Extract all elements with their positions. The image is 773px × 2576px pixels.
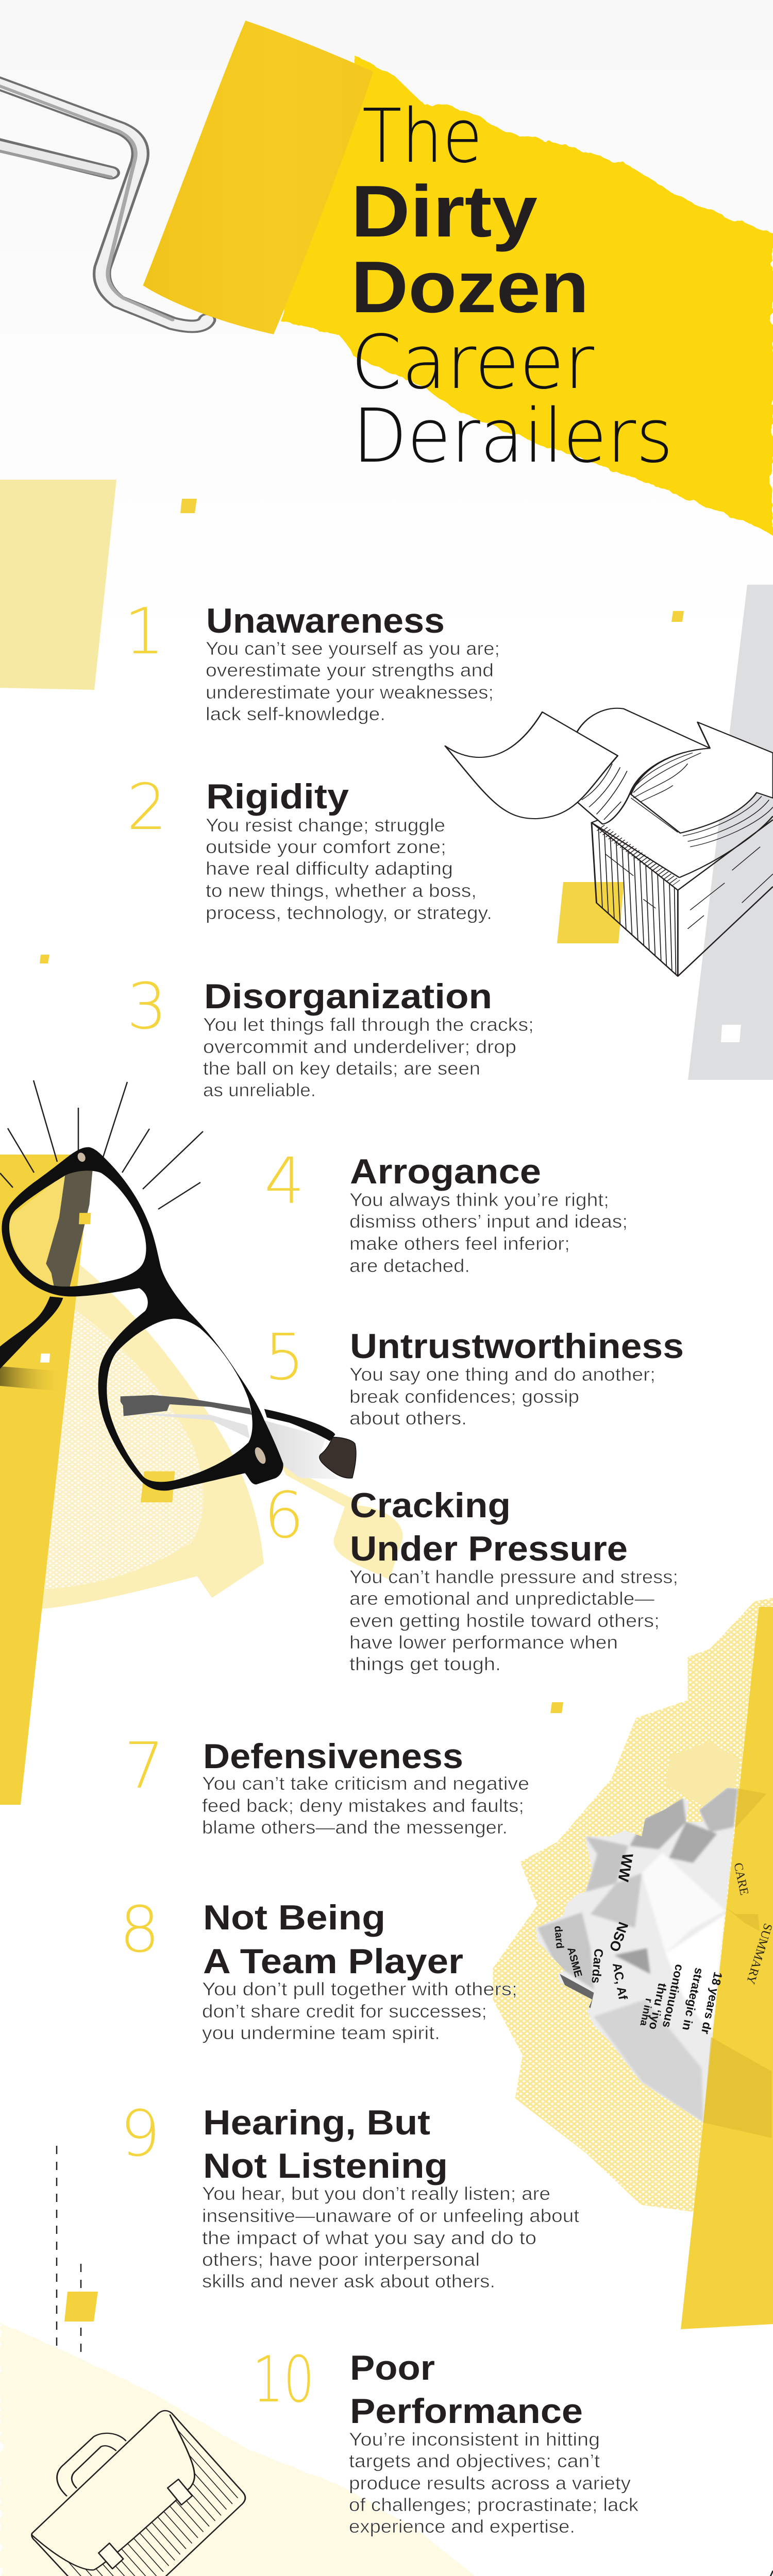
- description: [203, 1014, 534, 1100]
- yellow vertical block right: [681, 1607, 773, 2329]
- right temple arm: [264, 1409, 335, 1441]
- heading: Under Pressure: [350, 1529, 628, 1568]
- heading: Arrogance: [350, 1152, 541, 1191]
- title line: Derailers: Derailers: [352, 393, 673, 479]
- heading: Cracking: [350, 1486, 511, 1525]
- description: don’t share credit for successes;: [202, 2001, 487, 2022]
- serif text on crumpled sheet: CARE: [731, 1861, 751, 1896]
- yellow block behind file box: [557, 882, 624, 943]
- yellow block under right lens: [141, 1471, 175, 1502]
- heading: Performance: [350, 2392, 583, 2431]
- roller cylinder: [143, 21, 373, 334]
- description: the ball on key details; are seen: [203, 1058, 480, 1079]
- description: You can’t take criticism and negative: [202, 1773, 529, 1794]
- heading: Untrustworthiness: [350, 1327, 684, 1366]
- item 2: [127, 771, 492, 923]
- clasps: [98, 2479, 192, 2569]
- description: [202, 2183, 579, 2292]
- description: have real difficulty adapting: [206, 858, 453, 879]
- description: break confidences; gossip: [349, 1386, 579, 1407]
- pale paint band with ghost roller: [0, 2323, 773, 2576]
- small yellow square: [671, 611, 684, 622]
- description: are detached.: [349, 1255, 470, 1276]
- small yellow block: [64, 2292, 98, 2321]
- halftone blob behind crumpled paper: [493, 1598, 773, 2252]
- description: [202, 1773, 529, 1838]
- temple shadow on wall: [263, 1420, 339, 1479]
- temple shadow in lens: [131, 1414, 250, 1438]
- printed text on paper: NSO: [606, 1920, 632, 1954]
- description: you undermine team spirit.: [202, 2022, 440, 2043]
- description: produce results across a variety: [349, 2472, 631, 2494]
- ghost handle blob: [333, 1505, 403, 1580]
- case flap: [32, 2415, 195, 2570]
- printed text on paper: strategic in: [680, 1967, 706, 2032]
- ghost shape in halftone: [665, 1741, 740, 1807]
- item 3: [127, 970, 534, 1100]
- left temple: [0, 1297, 63, 1369]
- description: You let things fall through the cracks;: [203, 1014, 534, 1035]
- item 10: [253, 2343, 639, 2537]
- description: the impact of what you say and do to: [202, 2227, 536, 2248]
- heading: Unawareness: [206, 601, 445, 640]
- description: dismiss others’ input and ideas;: [349, 1211, 628, 1232]
- dashed lines: [57, 2146, 81, 2507]
- number 6: 6: [264, 1479, 304, 1553]
- description: of challenges; procrastinate; lack: [349, 2494, 639, 2515]
- ghost handle band: [281, 1464, 360, 1511]
- printed text on paper: AC, Af: [610, 1962, 630, 2001]
- paper creases under yellow block: [703, 1789, 771, 2138]
- printed text on paper: 18 years dr: [699, 1971, 725, 2036]
- description: underestimate your weaknesses;: [206, 682, 494, 703]
- frame: [2, 1147, 283, 1490]
- temple tip: [320, 1437, 356, 1478]
- case handle: [57, 2433, 126, 2496]
- title line: The: The: [362, 93, 482, 179]
- pale roller ghost behind glasses: [0, 1242, 403, 1608]
- description: outside your comfort zone;: [206, 836, 446, 857]
- heading: Hearing, But: [203, 2103, 430, 2142]
- description: others; have poor interpersonal: [202, 2249, 480, 2270]
- description: feed back; deny mistakes and faults;: [202, 1795, 524, 1816]
- number 4: 4: [264, 1145, 305, 1218]
- description: [206, 815, 492, 923]
- left lens shadow: [46, 1171, 93, 1287]
- item 1: [124, 595, 500, 724]
- hatching: [68, 2430, 238, 2576]
- number 1: 1: [124, 595, 164, 669]
- pale yellow block top left: [0, 480, 116, 690]
- small yellow square: [180, 499, 197, 513]
- description: lack self-knowledge.: [206, 703, 385, 724]
- number 10: 10: [253, 2343, 314, 2417]
- description: [349, 2429, 639, 2537]
- printed text on paper: thru ‘iyo: [647, 1982, 669, 2031]
- title: [351, 93, 673, 479]
- description: blame others—and the messenger.: [202, 1817, 508, 1838]
- description: as unreliable.: [203, 1079, 316, 1100]
- description: [202, 1978, 517, 2043]
- description: You say one thing and do another;: [349, 1364, 656, 1385]
- item 6: [264, 1479, 678, 1674]
- description: [206, 638, 500, 724]
- small white square: [721, 1025, 741, 1042]
- description: You always think you’re right;: [349, 1189, 609, 1210]
- description: overestimate your strengths and: [206, 659, 494, 681]
- number 2: 2: [127, 771, 167, 844]
- halftone fill: [0, 1300, 204, 1589]
- pale paint stroke: [0, 2323, 646, 2576]
- description: [349, 1364, 656, 1429]
- description: insensitive—unaware of or unfeeling about: [202, 2205, 579, 2226]
- number 8: 8: [120, 1893, 160, 1967]
- heading: Not Listening: [203, 2146, 448, 2185]
- printed text on paper: [552, 1852, 725, 2036]
- temple shadow on yellow block: [0, 1366, 64, 1391]
- description: [349, 1566, 678, 1674]
- icon: briefcase: [31, 2410, 246, 2576]
- metal roller handle: [0, 80, 207, 326]
- number 7: 7: [124, 1730, 164, 1803]
- item 8: [120, 1893, 517, 2043]
- dashed flight path upper: [732, 2571, 773, 2576]
- description: [349, 1189, 628, 1276]
- small yellow square: [40, 955, 49, 963]
- description: to new things, whether a boss,: [206, 880, 477, 901]
- item 4: [264, 1145, 628, 1276]
- description: You’re inconsistent in hitting: [349, 2429, 600, 2450]
- case body outline: [32, 2411, 245, 2576]
- description: You resist change; struggle: [206, 815, 445, 836]
- item 7: [124, 1730, 529, 1838]
- printed text on paper: dard: [552, 1925, 566, 1949]
- heading: Poor: [350, 2348, 435, 2387]
- title line: Dozen: Dozen: [351, 246, 589, 328]
- printed text on paper: ASME: [565, 1946, 584, 1978]
- description: You can’t see yourself as you are;: [206, 638, 500, 659]
- left lens tint: [9, 1171, 93, 1286]
- title line: Career: Career: [351, 319, 595, 405]
- description: have lower performance when: [349, 1632, 618, 1653]
- description: experience and expertise.: [349, 2516, 575, 2537]
- heading: A Team Player: [203, 1942, 463, 1981]
- heading: Rigidity: [206, 777, 349, 816]
- description: You can’t handle pressure and stress;: [349, 1566, 678, 1587]
- description: things get tough.: [349, 1653, 501, 1674]
- printed text on paper: WW: [614, 1852, 635, 1883]
- ray lines: [0, 1080, 203, 1209]
- number 3: 3: [127, 970, 167, 1044]
- serif text on crumpled sheet: [731, 1861, 773, 1986]
- small yellow square: [550, 1702, 563, 1713]
- description: targets and objectives; can’t: [349, 2450, 600, 2471]
- description: overcommit and underdeliver; drop: [203, 1036, 516, 1057]
- description: You hear, but you don’t really listen; are: [202, 2183, 550, 2204]
- item 9: [120, 2097, 579, 2292]
- heading: [203, 1898, 463, 1981]
- rivets: [76, 1151, 268, 1465]
- ghost roller shape: [0, 1242, 264, 1608]
- printed text on paper: Cards: [589, 1948, 606, 1984]
- small yellow square in lens: [79, 1213, 91, 1224]
- printed text on paper: continuous: [660, 1963, 686, 2029]
- item 5: [264, 1321, 684, 1429]
- printed text on paper: r inha: [637, 1997, 654, 2027]
- page background: [0, 0, 773, 644]
- right temple seen through lens: [121, 1395, 252, 1416]
- description: process, technology, or strategy.: [206, 902, 492, 923]
- glasses: [0, 1147, 356, 1502]
- description: are emotional and unpredictable—: [349, 1588, 654, 1609]
- crumpled paper: [536, 1788, 773, 2138]
- paper shading: [537, 1788, 738, 2123]
- description: You don’t pull together with others;: [202, 1978, 517, 1999]
- gray block right: [688, 585, 773, 1080]
- heading: Defensiveness: [203, 1737, 463, 1776]
- heading: Not Being: [203, 1898, 385, 1937]
- number 5: 5: [264, 1321, 305, 1395]
- description: even getting hostile toward others;: [349, 1610, 660, 1631]
- heading: [203, 2103, 448, 2185]
- yellow vertical block left: [0, 1155, 92, 1805]
- heading: Disorganization: [204, 977, 492, 1016]
- yellow paint stroke: [281, 57, 773, 535]
- description: about others.: [349, 1408, 467, 1429]
- paper silhouette: [536, 1788, 738, 2123]
- number 9: 9: [120, 2097, 160, 2171]
- icon: box of papers: [445, 708, 773, 976]
- white square: [40, 1353, 50, 1363]
- heading: [350, 2348, 583, 2431]
- description: skills and never ask about others.: [202, 2270, 495, 2292]
- hero: paint roller and stroke: [0, 21, 773, 535]
- description: make others feel inferior;: [349, 1233, 570, 1254]
- heading: [350, 1486, 628, 1568]
- title line: Dirty: Dirty: [351, 171, 537, 252]
